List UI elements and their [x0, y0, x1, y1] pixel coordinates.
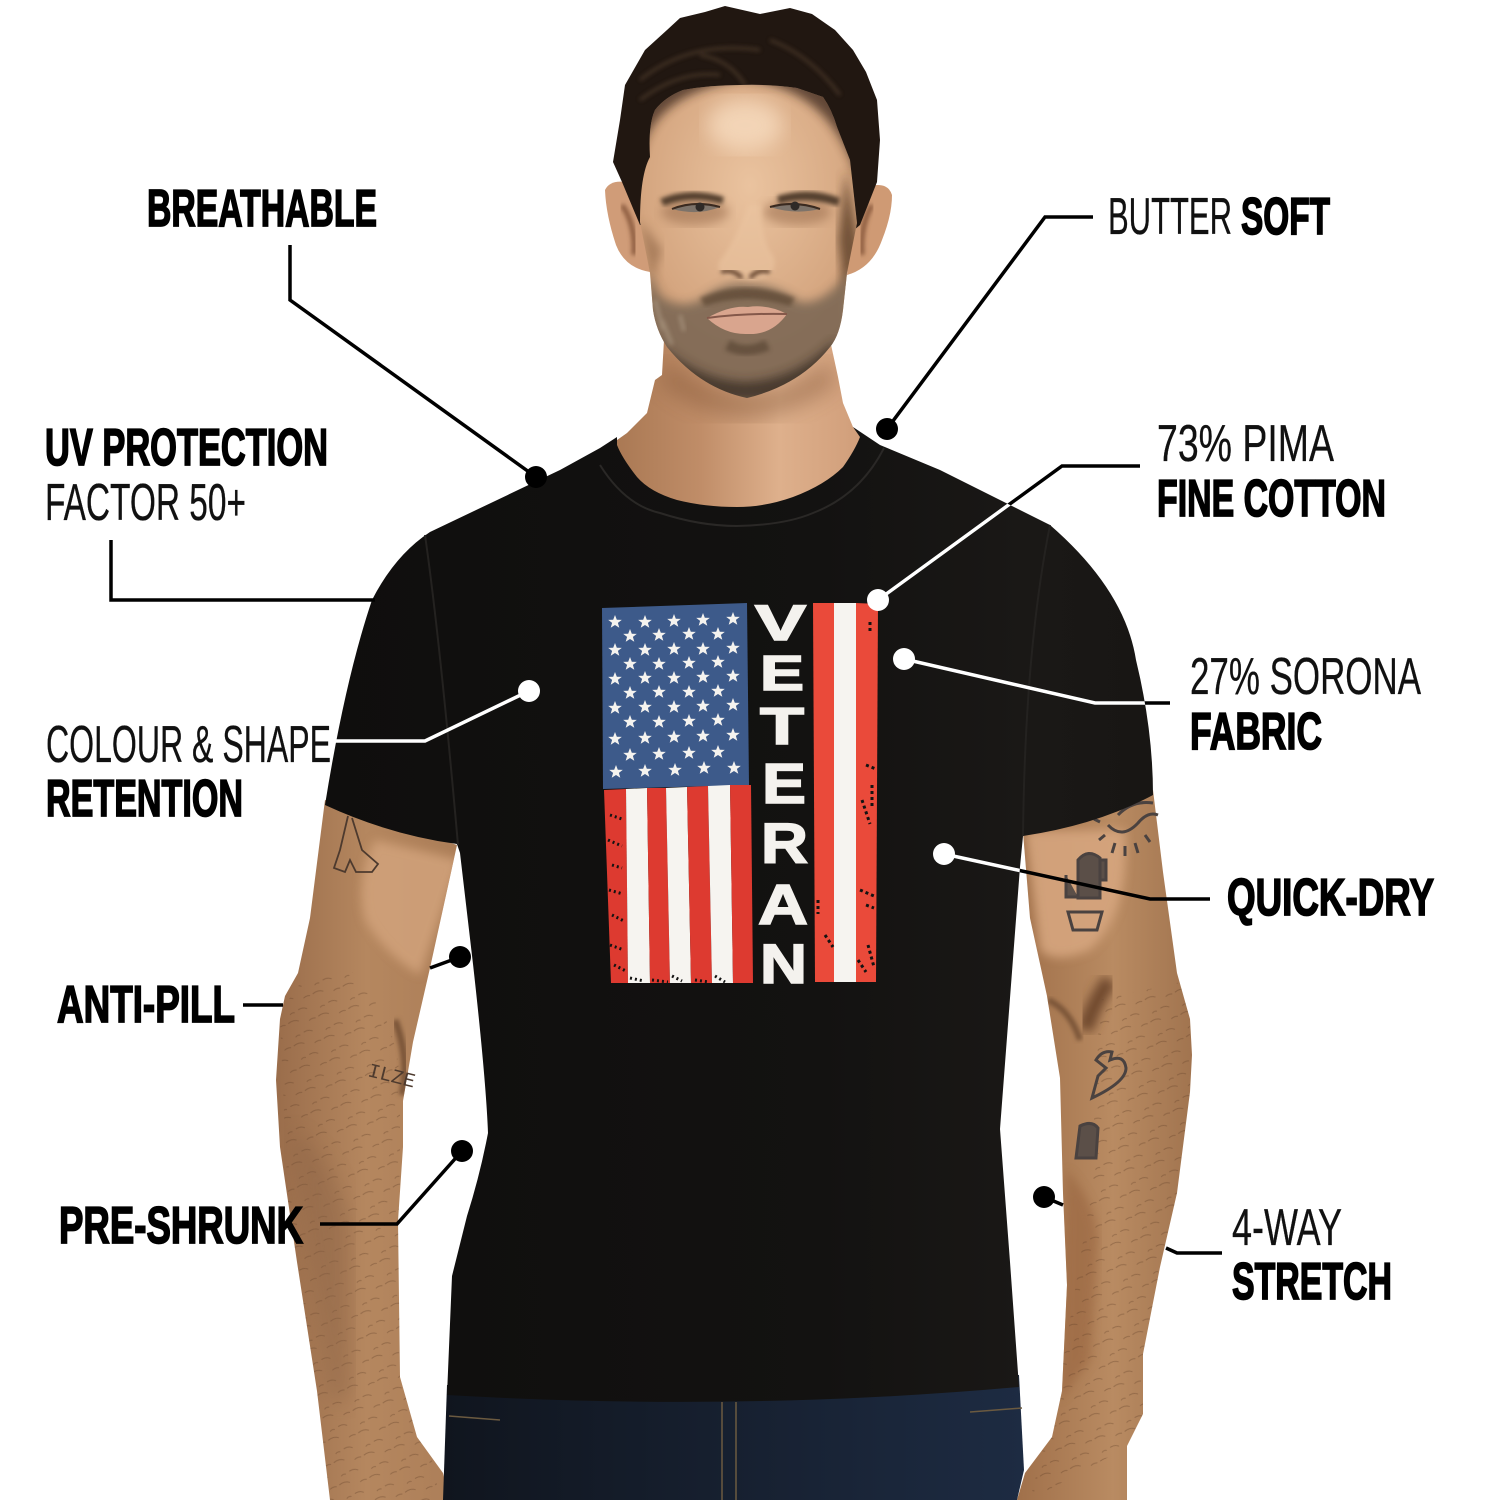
leader: pre-shrunk	[320, 1140, 473, 1224]
label: anti-pill: ANTI-PILL	[57, 976, 235, 1034]
label: colour and shape retention: RETENTION	[46, 770, 243, 828]
label: pre-shrunk: PRE-SHRUNK	[59, 1197, 303, 1255]
chin shadow	[662, 360, 835, 418]
leader: anti-pill	[243, 946, 471, 1005]
t-shirt	[325, 427, 1153, 1402]
label: pima cotton	[1157, 415, 1386, 528]
label: breathable: BREATHABLE	[147, 180, 377, 238]
label: colour and shape retention: COLOUR & SHAPE	[46, 716, 331, 774]
leader: pima cotton	[867, 466, 1140, 611]
VETERAN vertical text: T	[760, 698, 804, 756]
left arm	[276, 800, 460, 1500]
tattoos	[1066, 802, 1158, 1158]
mouth	[707, 306, 787, 334]
sleeve seams	[425, 525, 1050, 845]
flag stripes left	[604, 785, 753, 983]
collar rib	[600, 448, 884, 526]
leader: colour and shape retention	[335, 680, 540, 741]
VETERAN vertical text	[755, 595, 808, 995]
VETERAN vertical text: V	[755, 595, 807, 651]
label: sorona fabric	[1190, 648, 1421, 761]
label: pima cotton: 73% PIMA	[1157, 415, 1334, 473]
model photo: man wearing t-shirt	[276, 6, 1192, 1500]
forehead highlight	[707, 99, 783, 151]
label: colour and shape retention	[46, 716, 331, 828]
flag and VETERAN print	[602, 595, 878, 995]
label: 4-way stretch: 4-WAY	[1232, 1199, 1342, 1257]
nose	[718, 205, 775, 280]
label: uv protection: UV PROTECTION	[45, 419, 328, 477]
VETERAN vertical text: R	[761, 812, 808, 876]
VETERAN vertical text: E	[760, 647, 804, 701]
leader: quick-dry	[933, 843, 1210, 899]
label: pima cotton: FINE COTTON	[1157, 470, 1386, 528]
ears	[605, 182, 892, 275]
label: 4-way stretch	[1232, 1199, 1392, 1311]
label: butter soft: SOFT	[1241, 188, 1330, 246]
label: butter soft: BUTTER	[1108, 188, 1232, 246]
left arm: ILZE	[365, 1060, 417, 1094]
face side shadows	[836, 172, 857, 290]
eyes and brows	[660, 191, 840, 212]
beard	[650, 272, 847, 398]
hair	[613, 6, 880, 235]
leader: 4-way stretch	[1033, 1186, 1222, 1253]
right arm	[1017, 790, 1192, 1500]
VETERAN vertical text: A	[758, 873, 808, 937]
leader: uv protection	[111, 540, 375, 600]
label: uv protection: FACTOR 50+	[45, 474, 246, 532]
VETERAN vertical text: N	[760, 932, 807, 995]
VETERAN vertical text: E	[762, 752, 806, 816]
flag stripes right	[813, 603, 878, 982]
face	[640, 84, 857, 398]
flag canton with stars	[602, 603, 749, 789]
jeans	[443, 1375, 1024, 1500]
label: 4-way stretch: STRETCH	[1232, 1253, 1392, 1311]
eye sockets	[661, 199, 729, 225]
label: uv protection	[45, 419, 328, 532]
leader: sorona fabric	[893, 648, 1170, 703]
leader: breathable	[290, 245, 547, 488]
neck	[610, 340, 870, 520]
hairline shadow	[650, 85, 852, 177]
label: sorona fabric: FABRIC	[1190, 703, 1322, 761]
leader: butter soft	[876, 217, 1093, 440]
